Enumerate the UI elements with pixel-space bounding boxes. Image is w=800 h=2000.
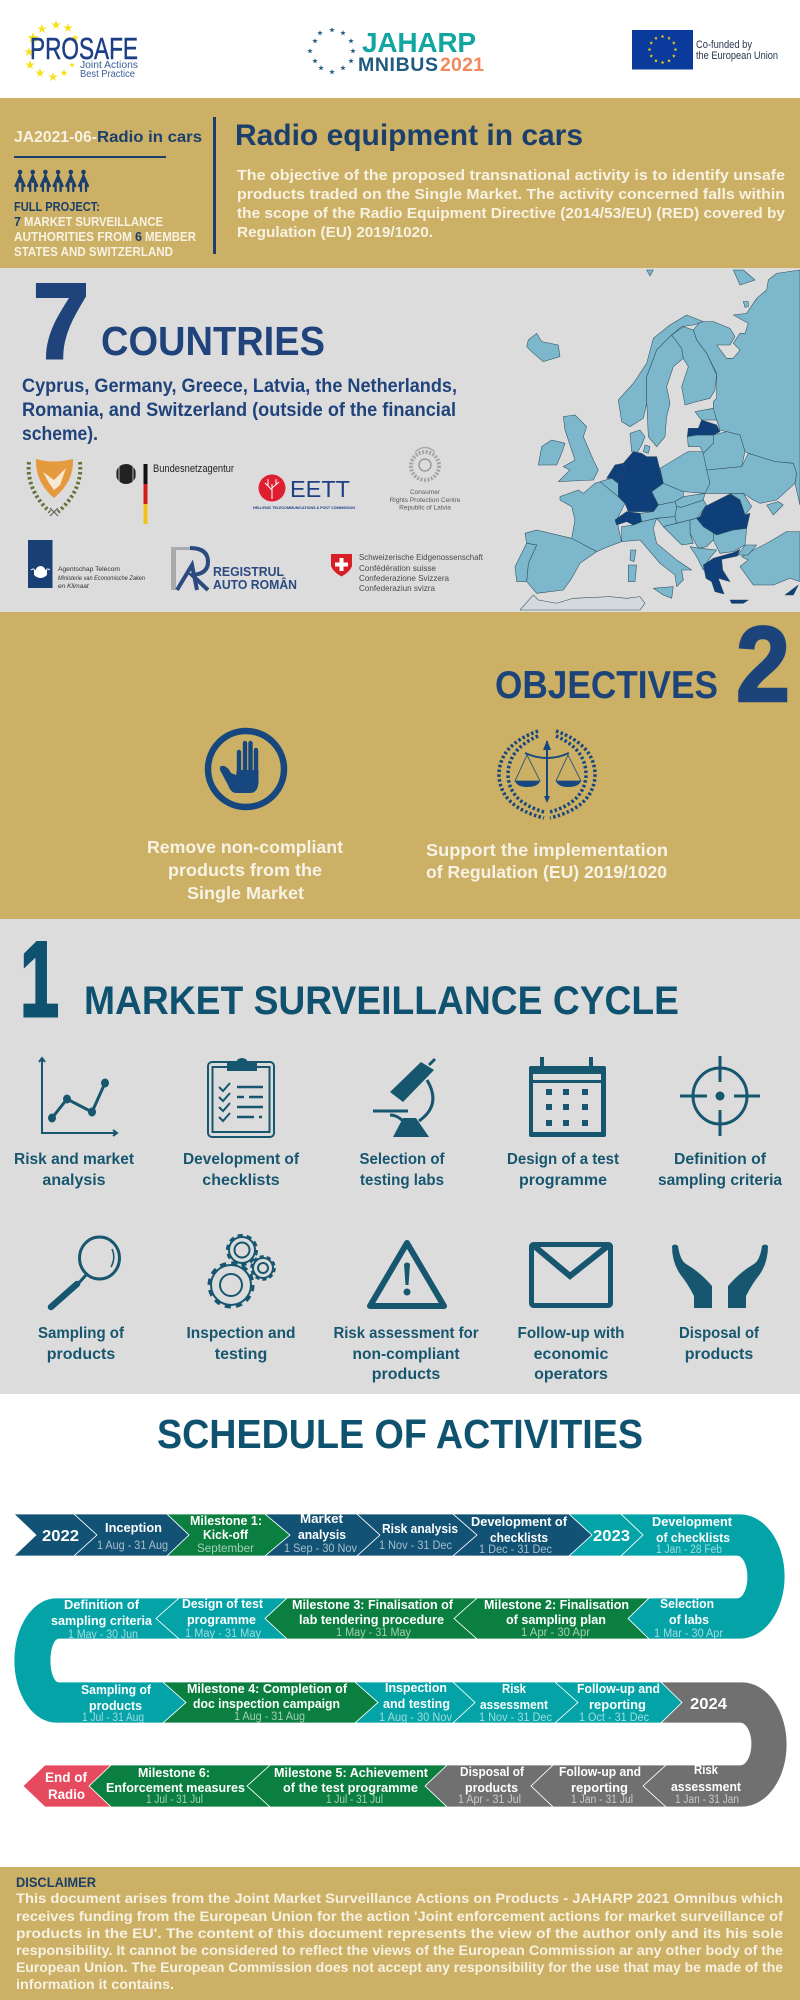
segment: 2023: 2023 [593, 1528, 630, 1545]
segment: milestone 1 [167, 1513, 290, 1556]
segment: inspection and testing [355, 1680, 475, 1724]
list of countries: scheme). [22, 423, 98, 445]
segment: definition of sampling criteria and sampling of products with bend: Sampling of [81, 1682, 152, 1697]
segment: milestone 5: of the test programme [283, 1780, 418, 1795]
logo: Consumer Rights Protection Centre Latvia: Consumer [410, 489, 441, 496]
segment: development of checklists 2022 [453, 1514, 592, 1556]
segment: 2024 and risk assessment with bend: 1 Jan - 31 Jan [675, 1794, 739, 1806]
segment: definition of sampling criteria and sampling of products with bend: Definition of [64, 1597, 140, 1612]
segment: disposal of products [425, 1764, 553, 1807]
segment: 2024 and risk assessment with bend [643, 1682, 787, 1807]
disclaimer text: products in the EU'. The content of this document represents the view of the author only and its his sole [16, 1925, 783, 1941]
segment: market analysis: Market [300, 1511, 344, 1526]
logo: JAHARP Omnibus 2021 [307, 27, 484, 76]
logo: EETT: HELLENIC TELECOMMUNICATIONS & POST COMMISSION [253, 506, 355, 510]
logo: Registrul Auto Roman: REGISTRUL [213, 565, 284, 579]
segment: milestone 5: 1 Jul - 31 Jul [326, 1794, 383, 1806]
project scope text: MEMBER [145, 230, 196, 244]
panel: logo header [24, 20, 778, 81]
timeline: schedule of activities [14, 1511, 787, 1807]
segment: development of checklists 2022: 1 Dec - 31 Dec [479, 1544, 552, 1556]
objective paragraph [237, 167, 786, 241]
segment: inception [74, 1514, 189, 1556]
logo: Consumer Rights Protection Centre Latvia: Republic of Latvia [399, 504, 451, 512]
project code: JA2021-06- [14, 129, 97, 146]
project scope text: 6 [135, 230, 142, 244]
segment: development of checklists 2023 and selection of labs with bend: of labs [669, 1612, 709, 1627]
logo: JAHARP Omnibus 2021: JAHARP [362, 27, 476, 58]
icon: stop hand [208, 731, 284, 807]
segment: milestone 4 [163, 1681, 378, 1723]
segment: milestone 5 [247, 1765, 447, 1807]
segment: inception: Inception [105, 1520, 162, 1535]
project scope text: 7 [14, 215, 21, 229]
step: inspection and testing: testing [215, 1346, 267, 1363]
heading: 7 countries: 7 [33, 261, 89, 381]
segment: milestone 2: 1 Apr - 30 Apr [521, 1627, 590, 1639]
step: development of checklists [183, 1058, 300, 1189]
segment: milestone 5: Milestone 5: Achievement [274, 1765, 429, 1780]
logo: Co-funded by the European Union: Co-funded by [696, 39, 752, 51]
icon: six people [16, 170, 88, 191]
segment: definition of sampling criteria and sampling of products with bend: 1 May - 30 Jun [68, 1629, 138, 1641]
logo: Agentschap Telecom [28, 540, 145, 590]
panel: 7 countries [0, 261, 800, 612]
step: design of a test programme: programme [519, 1172, 607, 1189]
disclaimer text: receives funding from the European Union for the action 'Joint enforcement actions for market surveillance of [16, 1908, 783, 1924]
heading: market surveillance cycle [20, 919, 679, 1039]
logo: Bundesnetzagentur: Bundesnetzagentur [153, 463, 234, 475]
segment: development of checklists 2023 and selection of labs with bend [621, 1514, 785, 1640]
heading: Radio equipment in cars: Radio equipment in cars [235, 119, 583, 152]
segment: risk assessment 2023: assessment [480, 1697, 549, 1712]
segment: design of test programme: 1 May - 31 May [185, 1628, 261, 1640]
segment: risk analysis [357, 1514, 477, 1556]
objective paragraph: Regulation (EU) 2019/1020. [237, 224, 433, 241]
segment: milestone 2: of sampling plan [506, 1612, 606, 1627]
step: disposal of products [672, 1244, 768, 1363]
segment: risk assessment 2023: 1 Nov - 31 Dec [479, 1712, 552, 1724]
step: risk assessment for non-compliant products: products [372, 1366, 440, 1383]
step: risk assessment for non-compliant products: non-compliant [352, 1346, 460, 1363]
logo: Swiss Confederation: Confederaziun svizra [359, 583, 435, 593]
logo: Bundesnetzagentur [116, 463, 234, 524]
segment: follow-up and reporting 2024: reporting [571, 1780, 628, 1795]
segment: development of checklists 2023 and selection of labs with bend: Selection [660, 1596, 714, 1611]
panel: project summary band [0, 98, 800, 268]
project scope text: MARKET SURVEILLANCE [24, 215, 163, 229]
objective paragraph: products traded on the Single Market. The activity concerned falls within [237, 186, 785, 203]
segment: development of checklists 2022: Development of [471, 1514, 568, 1529]
heading: market surveillance cycle: MARKET SURVEILLANCE CYCLE [84, 979, 679, 1023]
objective text: remove non-compliant products: products from the [168, 860, 322, 880]
segment: disposal of products: products [465, 1780, 518, 1795]
logo: Consumer Rights Protection Centre Latvia [390, 448, 461, 512]
logo: PROSAFE: Best Practice [80, 69, 135, 80]
segment: milestone 2 [454, 1597, 649, 1639]
logo: Agentschap Telecom: Agentschap Telecom [58, 566, 120, 573]
project scope text: AUTHORITIES FROM [14, 230, 132, 244]
step: development of checklists: checklists [202, 1172, 280, 1189]
logo: Co-funded by the European Union: the European Union [696, 50, 778, 62]
segment: market analysis: analysis [298, 1527, 346, 1542]
segment: milestone 3: Milestone 3: Finalisation of [292, 1597, 454, 1612]
step: definition of sampling criteria [658, 1056, 782, 1189]
segment: follow-up and reporting 2024 [531, 1764, 666, 1807]
step: inspection and testing: Inspection and [186, 1325, 296, 1342]
step: sampling of products: products [47, 1346, 115, 1363]
step: selection of testing labs: testing labs [360, 1172, 444, 1189]
objective text: remove non-compliant products [147, 837, 343, 903]
segment: design of test programme: Design of test [182, 1596, 264, 1611]
segment: disposal of products: 1 Apr - 31 Jul [458, 1794, 521, 1806]
objective text: support the implementation: Support the implementation [426, 840, 668, 860]
segment: market analysis: 1 Sep - 30 Nov [284, 1543, 357, 1555]
heading: 7 countries [33, 261, 325, 381]
segment: milestone 1: September [197, 1543, 254, 1555]
heading: schedule of activities: SCHEDULE OF ACTIVITIES [157, 1411, 643, 1457]
step: development of checklists: Development of [183, 1151, 300, 1168]
segment: milestone 6: Milestone 6: [138, 1765, 210, 1780]
project scope text: STATES AND SWITZERLAND [14, 245, 173, 259]
segment: 2022: 2022 [42, 1528, 79, 1545]
segment: end of radio: End of [45, 1769, 87, 1785]
logo: JAHARP Omnibus 2021: 2021 [440, 54, 484, 76]
logo: Registrul Auto Roman [171, 547, 297, 592]
disclaimer text: European Union. The European Commission does not accept any responsibility for the use that may be made of the [16, 1959, 783, 1975]
segment: end of radio: Radio [48, 1786, 85, 1802]
segment: 2024 and risk assessment with bend: 2024 [690, 1696, 727, 1713]
step: definition of sampling criteria: sampling criteria [658, 1172, 782, 1189]
segment: 2024 and risk assessment with bend: assessment [671, 1779, 742, 1794]
segment: follow-up and reporting 2023 [555, 1681, 682, 1724]
segment: inspection and testing: and testing [383, 1696, 450, 1711]
segment: definition of sampling criteria and sampling of products with bend: products [89, 1698, 142, 1713]
objective text: remove non-compliant products: Single Market [187, 883, 304, 903]
logo: Swiss Confederation: Schweizerische Eidgenossenschaft [359, 552, 484, 562]
step: follow-up with economic operators: economic [534, 1346, 608, 1363]
step: risk assessment for non-compliant products: Risk assessment for [334, 1325, 478, 1342]
segment: market analysis [265, 1511, 380, 1556]
heading: objectives: OBJECTIVES [495, 664, 718, 707]
segment: milestone 4: doc inspection campaign [193, 1696, 340, 1711]
step: risk and market analysis: Risk and market [14, 1151, 135, 1168]
segment: inception: 1 Aug - 31 Aug [97, 1540, 168, 1552]
step: disposal of products: Disposal of [679, 1325, 760, 1342]
logo: Swiss Confederation: Confederazione Svizzera [359, 573, 449, 583]
segment: milestone 3 [265, 1597, 477, 1639]
segment: definition of sampling criteria and sampling of products with bend [14, 1597, 186, 1724]
segment: milestone 3: 1 May - 31 May [336, 1627, 411, 1639]
disclaimer text: This document arises from the Joint Market Surveillance Actions on Products - JAHARP 2021 Omnibus which [16, 1890, 783, 1906]
segment: follow-up and reporting 2024: Follow-up and [559, 1764, 641, 1779]
segment: design of test programme: programme [187, 1612, 256, 1627]
segment: disposal of products: Disposal of [460, 1764, 525, 1779]
segment: development of checklists 2022: checklists [490, 1530, 548, 1545]
segment: inspection and testing: Inspection [385, 1680, 447, 1695]
logo: EETT [253, 474, 355, 510]
logo: PROSAFE [24, 20, 138, 81]
segment: follow-up and reporting 2023: reporting [589, 1697, 646, 1712]
segment: milestone 1: Kick-off [203, 1527, 249, 1542]
project code [14, 129, 202, 158]
step: follow-up with economic operators: operators [534, 1366, 608, 1383]
logo: PROSAFE: PROSAFE [30, 31, 138, 66]
heading: 7 countries: COUNTRIES [101, 318, 325, 364]
step: follow-up with economic operators: Follow-up with [518, 1325, 624, 1342]
logo: Swiss Confederation [331, 552, 484, 593]
segment: 2023 [569, 1514, 643, 1556]
segment: milestone 6 [89, 1765, 270, 1807]
segment: 2022 [14, 1514, 97, 1556]
step: selection of testing labs [360, 1059, 445, 1189]
step: risk and market analysis: analysis [42, 1172, 106, 1189]
segment: risk analysis: 1 Nov - 31 Dec [379, 1540, 452, 1552]
disclaimer text: responsibility. It cannot be considered to reflect the views of the European Commission ar any other body of the [16, 1942, 783, 1958]
heading: objectives: 2 [736, 604, 790, 724]
segment: design of test programme [156, 1596, 287, 1640]
segment: risk assessment 2023: Risk [502, 1681, 527, 1696]
disclaimer heading: DISCLAIMER [16, 1874, 96, 1890]
segment: end of radio [23, 1765, 111, 1807]
step: risk and market analysis [14, 1058, 135, 1189]
heading: objectives [495, 604, 790, 724]
disclaimer text: information it contains. [16, 1976, 174, 1992]
step: sampling of products [38, 1237, 125, 1363]
segment: definition of sampling criteria and sampling of products with bend: 1 Jul - 31 Aug [82, 1712, 144, 1724]
step: definition of sampling criteria: Definition of [674, 1151, 767, 1168]
panel: 2 objectives [0, 604, 800, 919]
objective paragraph: The objective of the proposed transnational activity is to identify unsafe [237, 167, 785, 184]
disclaimer text [16, 1890, 783, 1992]
step: selection of testing labs: Selection of [360, 1151, 445, 1168]
segment: development of checklists 2023 and selection of labs with bend: of checklists [656, 1530, 730, 1545]
panel: disclaimer [0, 1867, 800, 2000]
step: risk assessment for non-compliant products [334, 1243, 478, 1383]
logo: Cyprus [29, 459, 80, 516]
segment: definition of sampling criteria and sampling of products with bend: sampling criteria [51, 1613, 153, 1628]
step: design of a test programme: Design of a test [507, 1151, 620, 1168]
objective text: remove non-compliant products: Remove non-compliant [147, 837, 343, 857]
objective paragraph: the scope of the Radio Equipment Directive (2014/53/EU) (RED) covered by [237, 205, 786, 222]
step: inspection and testing [186, 1236, 296, 1363]
segment: development of checklists 2023 and selection of labs with bend: 1 Jan - 28 Feb [656, 1544, 722, 1556]
segment: inspection and testing: 1 Aug - 30 Nov [379, 1712, 452, 1724]
objective text: support the implementation [426, 840, 668, 882]
segment: risk analysis: Risk analysis [382, 1521, 458, 1536]
project scope text: FULL PROJECT: [14, 200, 100, 214]
segment: milestone 3: lab tendering procedure [299, 1612, 444, 1627]
segment: milestone 2: Milestone 2: Finalisation [484, 1597, 629, 1612]
logo: JAHARP Omnibus 2021: MNIBUS [358, 54, 438, 76]
heading: market surveillance cycle: 1 [20, 919, 59, 1039]
segment: development of checklists 2023 and selection of labs with bend: Development [652, 1514, 733, 1529]
segment: risk assessment 2023 [453, 1681, 578, 1724]
logo: Consumer Rights Protection Centre Latvia: Rights Protection Centre [390, 497, 461, 504]
objective text: support the implementation: of Regulation (EU) 2019/1020 [426, 862, 667, 882]
segment: 2024 and risk assessment with bend: Risk [694, 1762, 719, 1777]
logo: Agentschap Telecom: Ministerie van Economische Zaken [58, 575, 145, 582]
step: follow-up with economic operators [518, 1244, 624, 1383]
project scope text [14, 200, 196, 259]
segment: milestone 4: 1 Aug - 31 Aug [234, 1711, 305, 1723]
segment: follow-up and reporting 2023: Follow-up and [577, 1681, 660, 1696]
step: sampling of products: Sampling of [38, 1325, 125, 1342]
step: design of a test programme [507, 1057, 620, 1189]
logo: Co-funded by the European Union [632, 30, 778, 70]
list of countries: Romania, and Switzerland (outside of the financial [22, 399, 456, 421]
logo: EETT: EETT [290, 476, 350, 502]
list of countries: Cyprus, Germany, Greece, Latvia, the Netherlands, [22, 375, 457, 397]
segment: milestone 6: 1 Jul - 31 Jul [146, 1794, 203, 1806]
logo: PROSAFE: Joint Actions [80, 60, 138, 71]
list of countries [22, 375, 457, 445]
map of Europe with participating countries highlighted [515, 270, 800, 610]
step: disposal of products: products [685, 1346, 753, 1363]
segment: follow-up and reporting 2023: 1 Oct - 31 Dec [579, 1712, 649, 1724]
logo: Swiss Confederation: Confédération suisse [359, 563, 436, 573]
segment: development of checklists 2023 and selection of labs with bend: 1 Mar - 30 Apr [654, 1628, 723, 1640]
logo: Agentschap Telecom: en Klimaat [58, 583, 90, 590]
segment: milestone 4: Milestone 4: Completion of [187, 1681, 348, 1696]
icon: scales in laurel wreath [499, 731, 595, 818]
segment: follow-up and reporting 2024: 1 Jan - 31 Jul [571, 1794, 633, 1806]
panel: market surveillance cycle [0, 919, 800, 1394]
segment: milestone 1: Milestone 1: [190, 1513, 262, 1528]
segment: milestone 6: Enforcement measures [106, 1780, 245, 1795]
project code: Radio in cars [97, 129, 202, 146]
logo: Registrul Auto Roman: AUTO ROMÂN [213, 577, 297, 592]
